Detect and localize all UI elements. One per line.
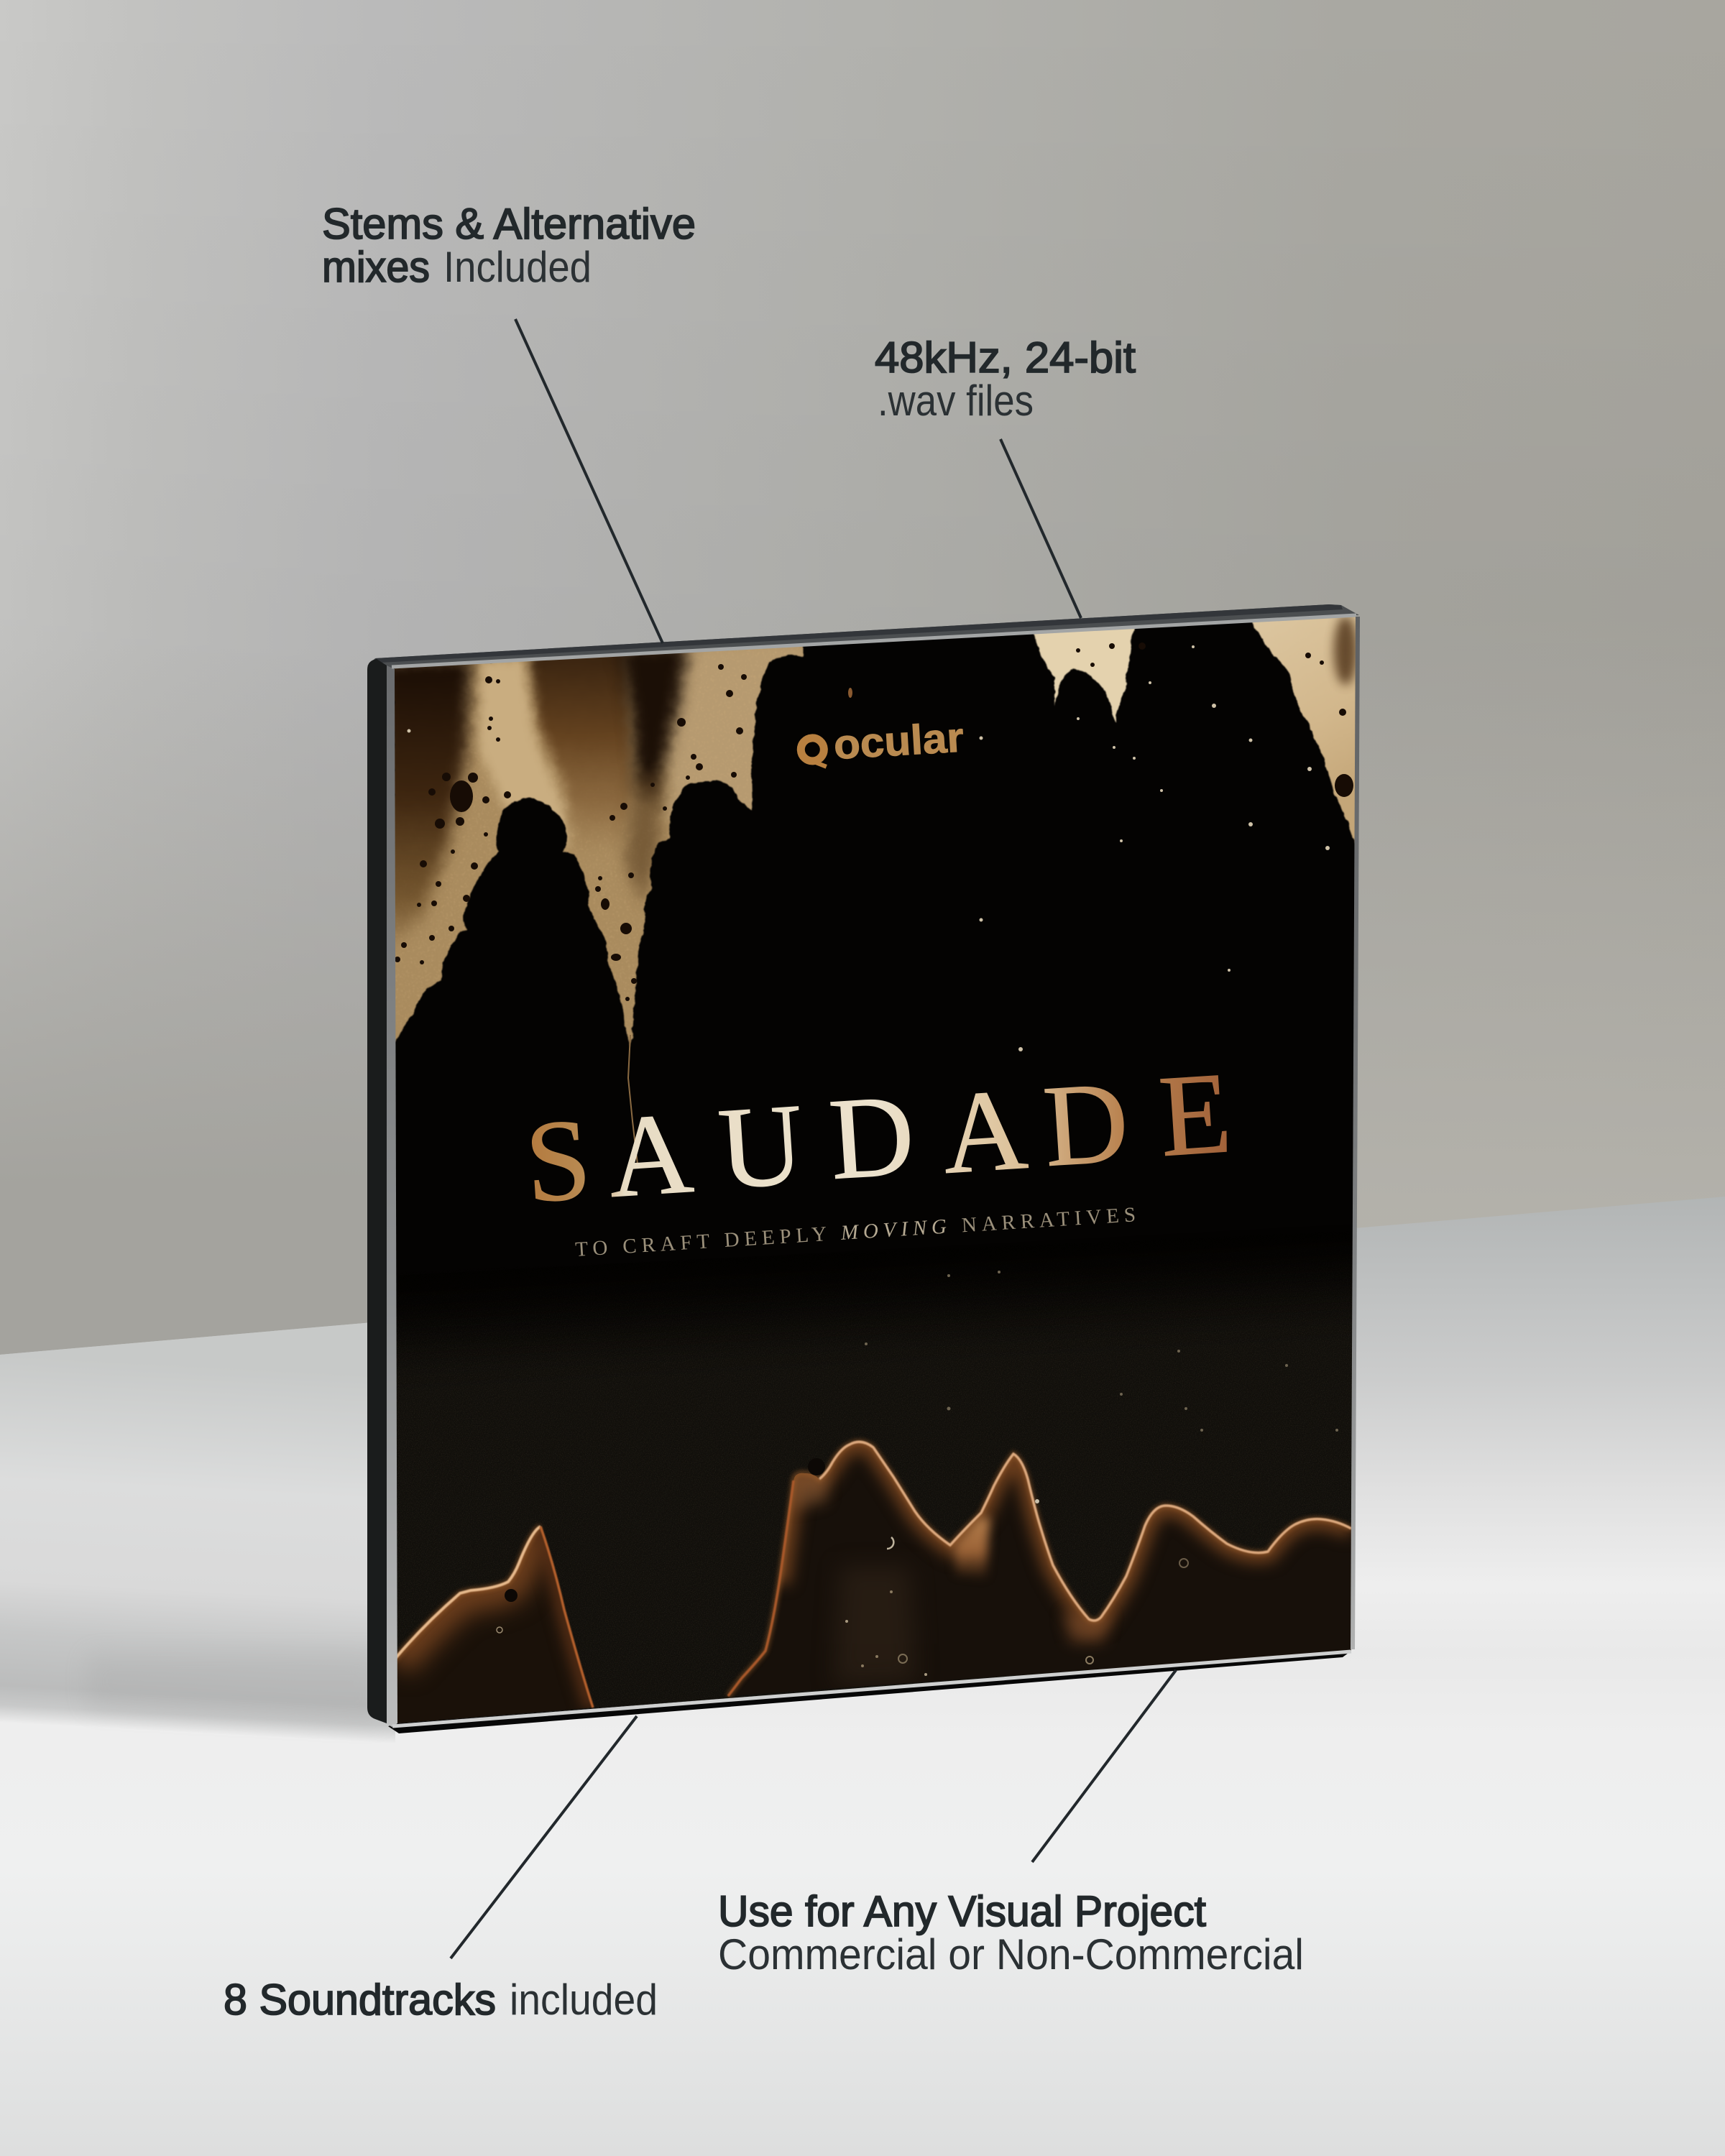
- callout: soundtracks included: included: [510, 1976, 658, 2024]
- callout: soundtracks included: [224, 1716, 658, 2024]
- background floor: [0, 1197, 1725, 2156]
- artwork: crack line: [628, 1035, 638, 1164]
- floor shadow beside panel: [0, 1321, 395, 1754]
- callout: usage rights: Use for Any Visual Project: [718, 1887, 1206, 1935]
- artwork: dark spots in stains: [395, 642, 1353, 1001]
- album subtitle: TO CRAFT DEEPLY MOVING NARRATIVES: [574, 1203, 1140, 1261]
- callout: usage rights: [718, 1670, 1304, 1978]
- product panel: cover artwork: [394, 617, 1356, 1723]
- callout: audio format: [875, 333, 1136, 618]
- callout: stems and alternative mixes: Included: [443, 243, 592, 291]
- callout: soundtracks included: 8 Soundtracks: [224, 1976, 496, 2024]
- logo: ocular: ocular: [832, 714, 965, 768]
- artwork: light specks: [407, 645, 1330, 1051]
- artwork: centre stain: [1034, 626, 1133, 723]
- waveform right: [728, 1442, 1351, 1696]
- artwork marks above title: [848, 688, 852, 698]
- logo: ocular: [796, 723, 963, 769]
- waveform left: [394, 1526, 593, 1723]
- callout: audio format: .wav files: [878, 377, 1034, 425]
- callout: audio format: 48kHz, 24-bit: [875, 333, 1136, 382]
- album title: SAUDADE: SAUDADE: [522, 1049, 1235, 1227]
- callout: stems and alternative mixes: mixes: [322, 243, 430, 291]
- callout: stems and alternative mixes: [322, 200, 696, 643]
- artwork: right stain: [1251, 611, 1358, 853]
- callout: usage rights: Commercial or Non-Commercial: [718, 1930, 1304, 1978]
- artwork: lower tone dither: [397, 1278, 1353, 1718]
- faint dust in lower artwork: [865, 1271, 1338, 1432]
- callout: stems and alternative mixes: Stems & Alternative: [322, 200, 696, 248]
- artwork: left stain: [394, 647, 804, 1046]
- panel glass edge: [387, 615, 1358, 1727]
- artwork: lower reflection tone: [397, 1302, 1352, 1723]
- artwork: stain darkening top right: [1334, 616, 1357, 685]
- product panel: side and back of the case: [367, 604, 1359, 1733]
- background wall: [0, 0, 1725, 1365]
